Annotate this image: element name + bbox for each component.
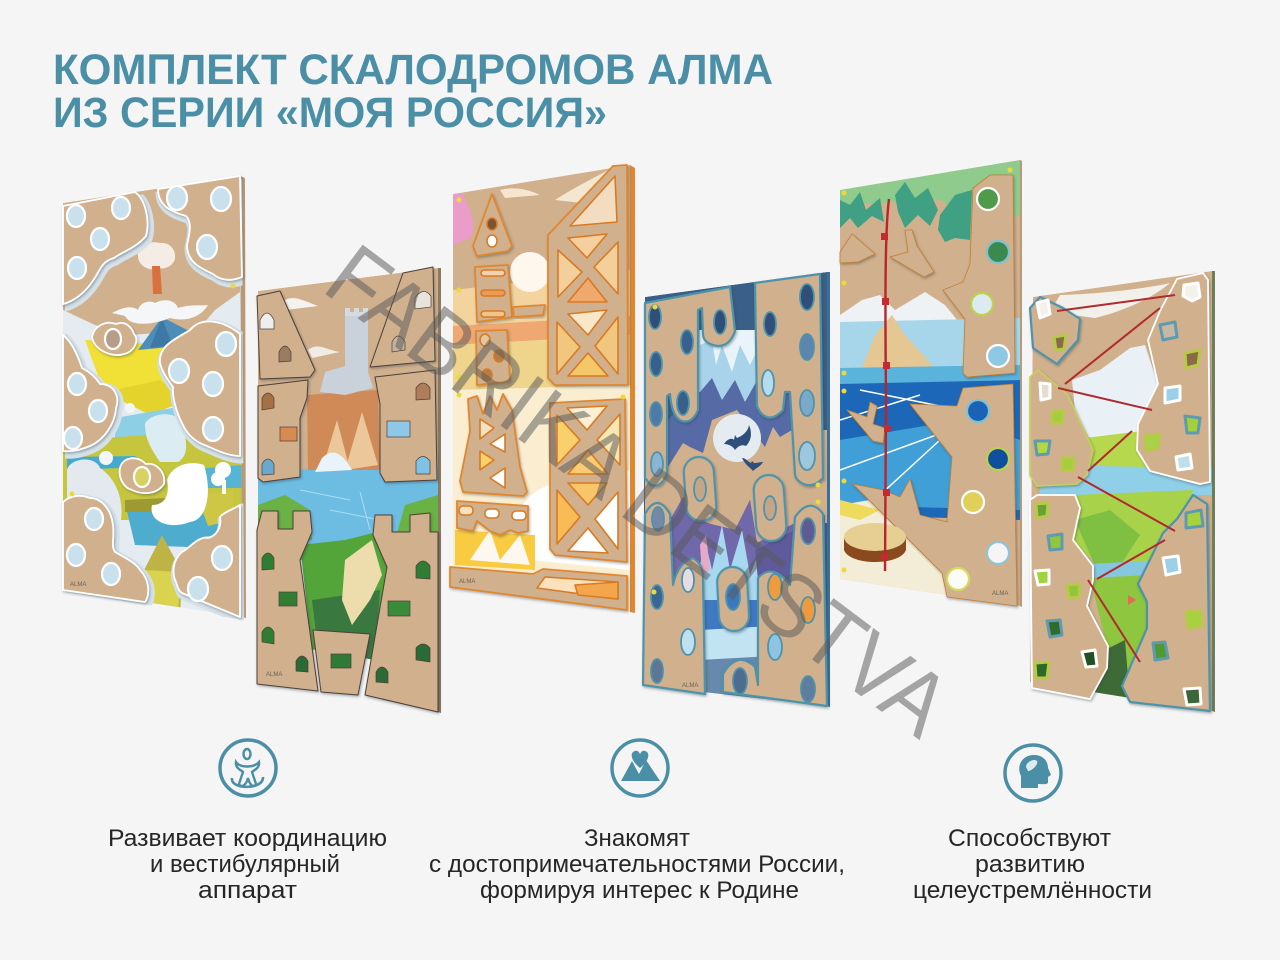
benefit: determination: Способствуют [948, 825, 1111, 852]
mounting pins [652, 304, 820, 594]
title [53, 46, 773, 137]
benefit: landmarks: с достопримечательностями России, [429, 851, 845, 878]
panel: climbing wall with ice cave and moon [643, 272, 830, 707]
right holds board pieces [840, 175, 1017, 606]
windows of castle wall [260, 291, 431, 683]
logo: ALMA [682, 683, 698, 689]
round holds of Baikal wall [947, 188, 1009, 590]
red rope [881, 199, 891, 571]
title: КОМПЛЕКТ СКАЛОДРОМОВ АЛМА [53, 46, 773, 94]
openings in orange frames [459, 176, 620, 599]
logo: ALMA [266, 672, 282, 678]
panel: climbing wall with iceberg and valley [1030, 271, 1215, 712]
benefit: coordination: аппарат [198, 877, 297, 904]
panel: climbing wall with sunset scene and orange frames [450, 165, 635, 613]
moon and bats [713, 414, 763, 471]
benefit: coordination: Развивает координацию [108, 825, 387, 852]
logo: ALMA [70, 582, 86, 588]
benefit: determination: развитию [975, 851, 1085, 878]
cloud backing layers [65, 179, 244, 620]
icon: heart over mountains [612, 740, 668, 796]
drum [844, 523, 906, 562]
icon: balancing person [220, 740, 276, 796]
icon: head with brain [1005, 745, 1061, 801]
logo: ALMA [992, 591, 1008, 597]
mounting pins [456, 198, 626, 400]
mounting pins [842, 168, 1012, 572]
tower pieces of castle wall [257, 267, 438, 712]
panel: climbing wall with volcanoes and clouds [63, 176, 246, 620]
watermark: FABRIKA DETSTVA [308, 226, 968, 756]
mounting pins [70, 284, 236, 496]
benefit: landmarks [429, 740, 845, 904]
panel: climbing wall with castle on a cliff [257, 267, 441, 713]
blue-edged pieces [643, 274, 827, 706]
benefit: coordination [108, 740, 387, 904]
benefit: determination [913, 745, 1152, 904]
polygonal holds [1035, 283, 1203, 705]
benefit: landmarks: формируя интерес к Родине [480, 877, 799, 904]
benefit: determination: целеустремлённости [913, 877, 1152, 904]
red ropes [1057, 295, 1175, 662]
benefit: coordination: и вестибулярный [150, 851, 340, 878]
panel: climbing wall with lake Baikal [840, 160, 1022, 607]
logo: ALMA [459, 579, 475, 585]
orange frame pieces [450, 165, 628, 610]
oval holds [649, 284, 815, 702]
title: ИЗ СЕРИИ «МОЯ РОССИЯ» [53, 89, 607, 137]
holes of volcano wall [64, 186, 236, 601]
beige rock pieces [1030, 273, 1210, 711]
cloud pieces of volcano wall [63, 176, 242, 617]
benefit: landmarks: Знакомят [584, 825, 690, 852]
